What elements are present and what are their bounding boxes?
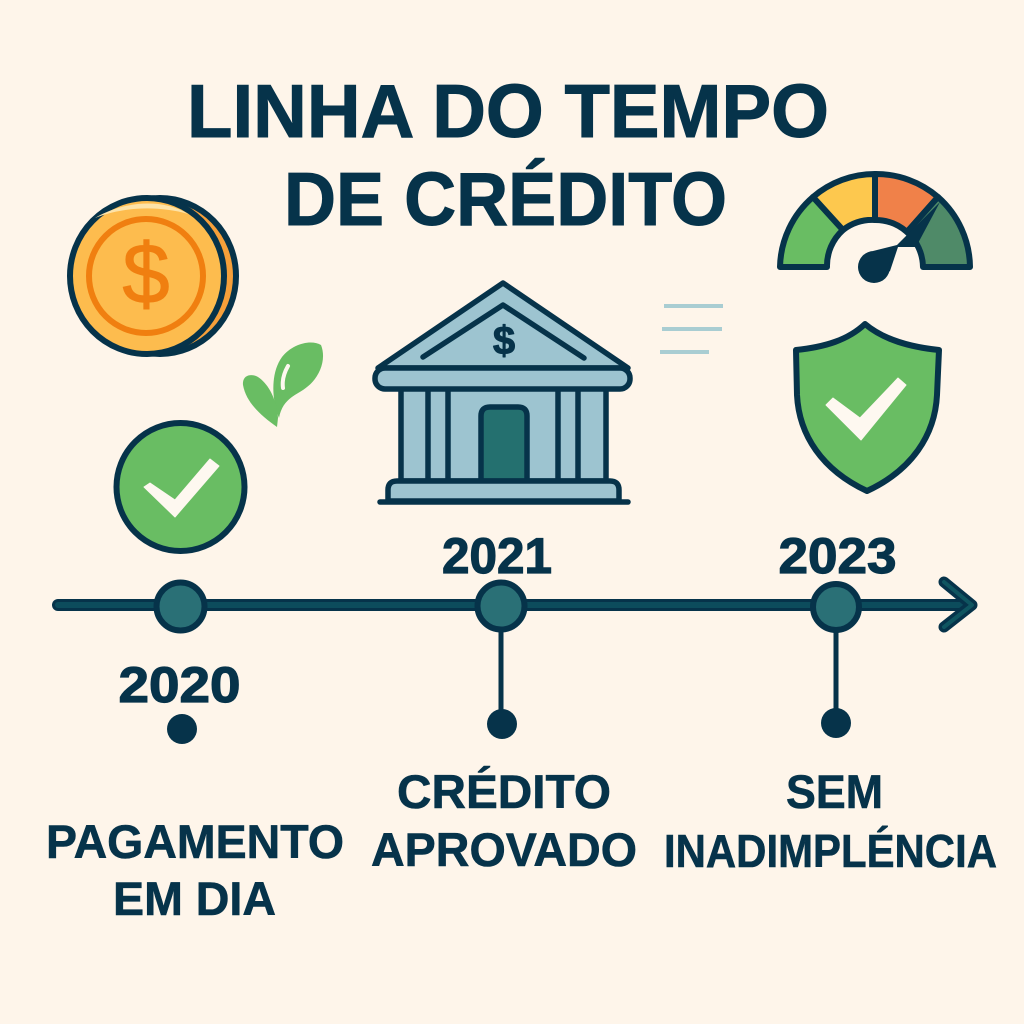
label: sem inadimplência: INADIMPLÉNCIA <box>664 825 997 877</box>
timeline axis arrow <box>58 582 972 627</box>
icon: credit gauge <box>780 174 970 283</box>
label: crédito aprovado: APROVADO <box>371 823 637 876</box>
label: crédito aprovado: CRÉDITO <box>397 765 611 818</box>
icon: bank: $ <box>493 319 515 363</box>
icon: bank <box>375 283 630 502</box>
marker 2021 <box>478 582 524 739</box>
decorative motion lines <box>660 306 723 352</box>
label: pagamento em dia: EM DIA <box>113 872 276 925</box>
icon: green check circle <box>116 423 244 551</box>
icon: coin: $ <box>122 227 170 322</box>
marker 2023 <box>813 584 859 738</box>
year 2021: 2021 <box>442 528 552 584</box>
title: LINHA DO TEMPO <box>187 69 829 153</box>
title: DE CRÉDITO <box>284 157 727 241</box>
year 2023: 2023 <box>778 528 896 584</box>
year 2020: 2020 <box>118 657 240 713</box>
icon: shield with check <box>796 324 939 491</box>
label: sem inadimplência: SEM <box>786 765 883 818</box>
label: pagamento em dia <box>46 815 344 925</box>
label: pagamento em dia: PAGAMENTO <box>46 815 344 868</box>
label: sem inadimplência <box>664 765 997 877</box>
icon: coin <box>70 198 236 354</box>
title <box>187 69 829 241</box>
icon: leaf <box>243 342 323 427</box>
label: crédito aprovado <box>371 765 637 876</box>
marker 2020 <box>156 582 204 744</box>
